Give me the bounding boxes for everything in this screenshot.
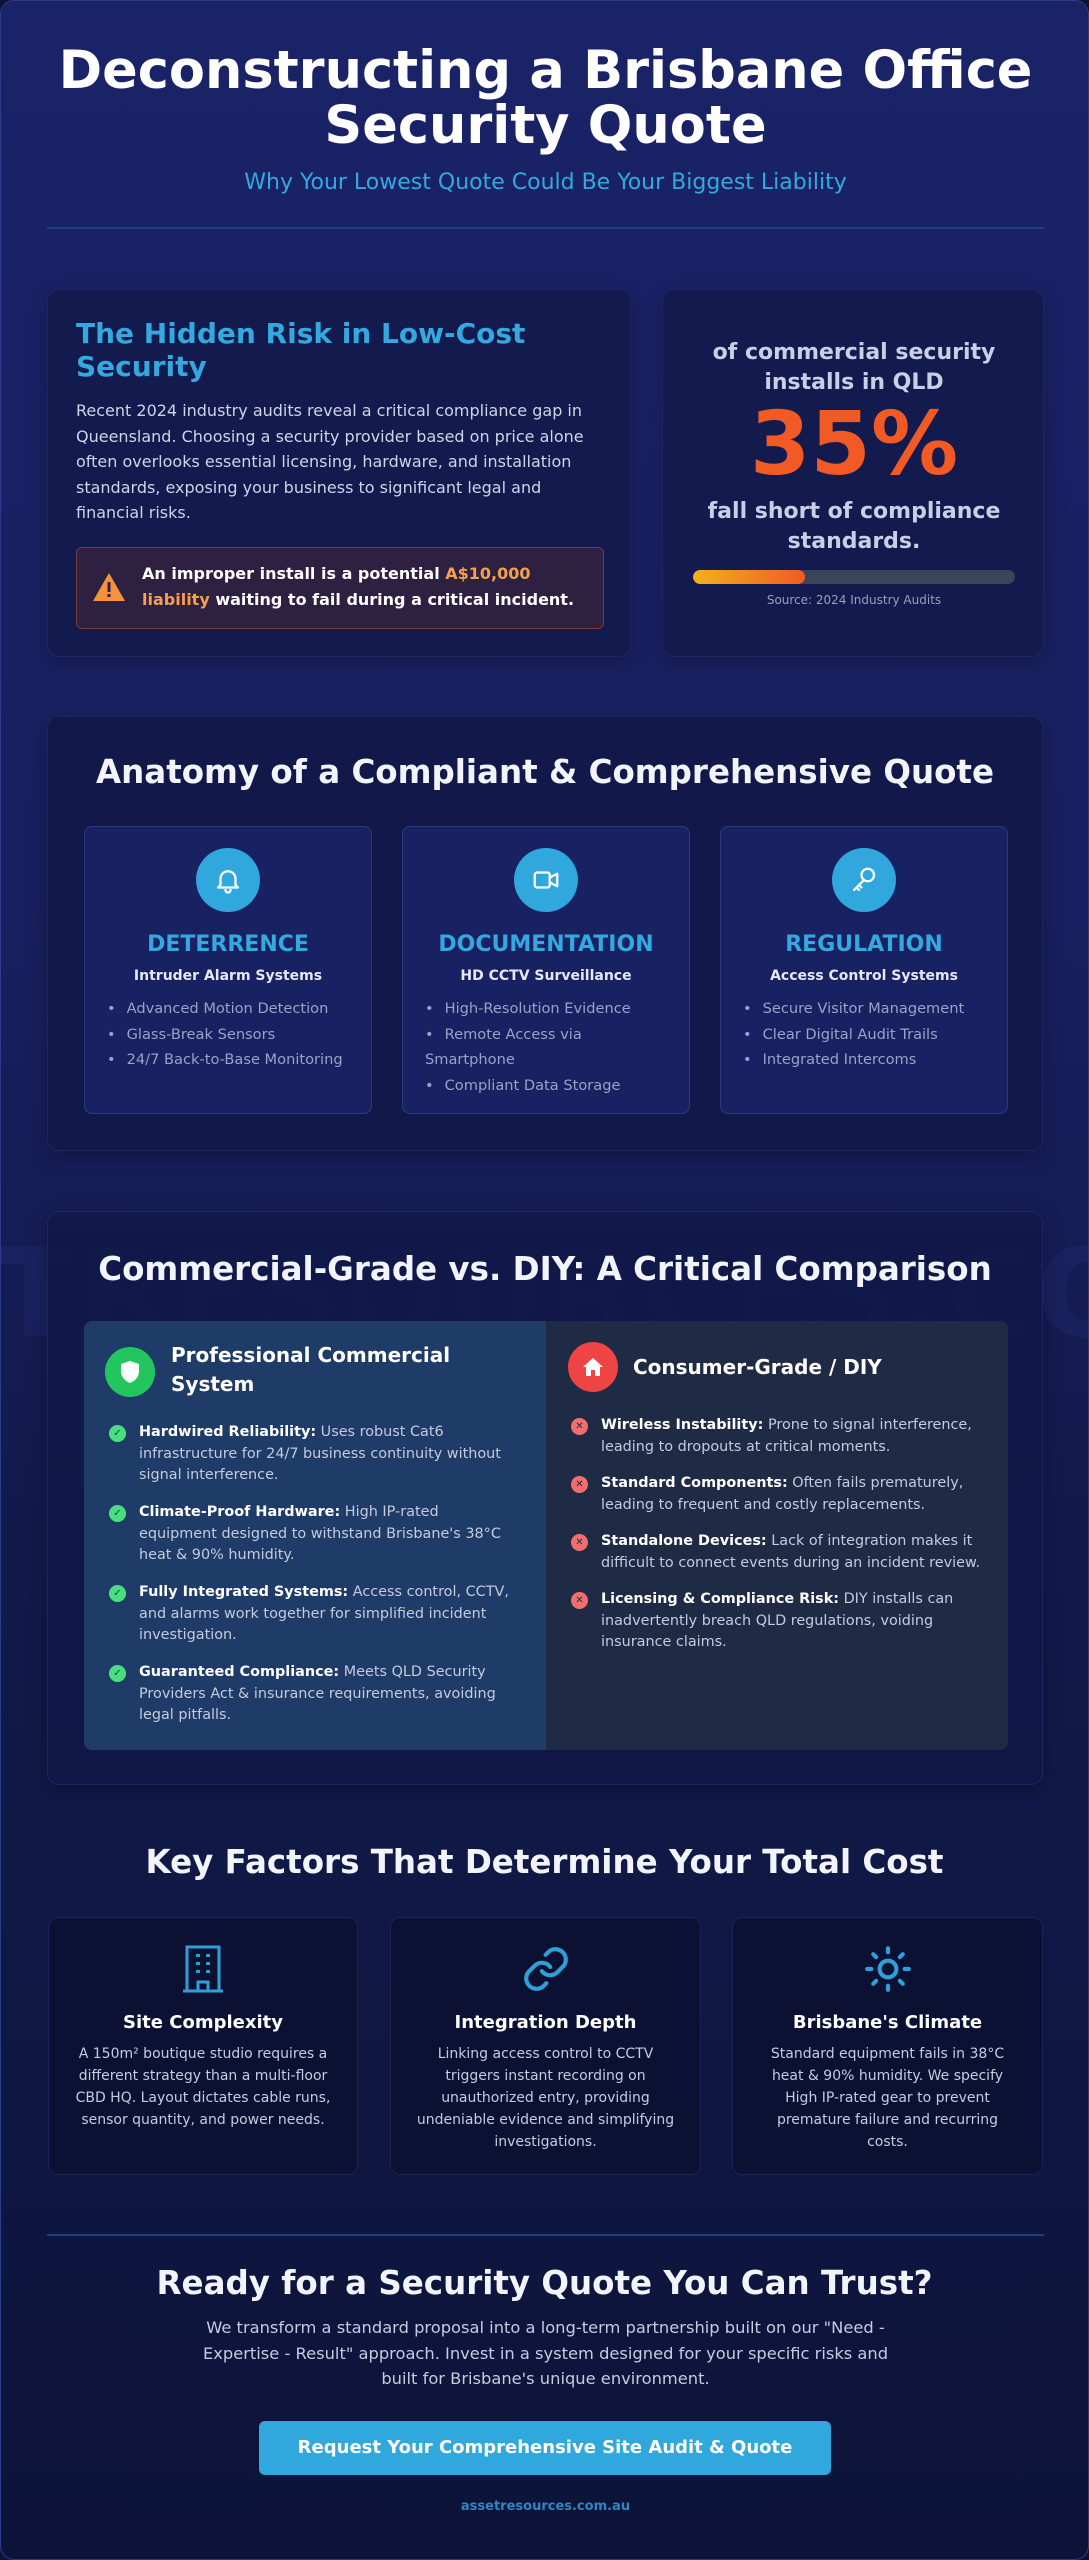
subtitle: Why Your Lowest Quote Could Be Your Biggest Liability (244, 170, 847, 195)
card: regulation: Clear Digital Audit Trails (763, 1026, 938, 1042)
callout: liability warning (76, 547, 604, 629)
card: integration depth: Integration Depth (455, 2012, 636, 2033)
column: professional (84, 1321, 546, 1750)
column: DIY: ✕ (575, 1421, 584, 1432)
items: professional (109, 1424, 509, 1723)
card: documentation: High-Resolution Evidence (445, 1000, 631, 1017)
icon: house (568, 1342, 618, 1392)
footer link: assetresources.com.au (461, 2499, 630, 2514)
heading: professional: Professional Commercial System (171, 1343, 450, 1396)
stat label bottom: fall short of compliance standards. (708, 499, 1000, 554)
card: regulation: REGULATION (785, 932, 943, 957)
column: professional: ✓ (113, 1588, 122, 1599)
items: DIY: Wireless Instability: Prone to signal interference, leading to dropouts at critical moments. (601, 1417, 972, 1455)
card: documentation: DOCUMENTATION (438, 932, 654, 957)
heading: anatomy: Anatomy of a Compliant & Comprehensive Quote (96, 753, 994, 791)
card: documentation: Compliant Data Storage (445, 1076, 620, 1094)
card: regulation (720, 826, 1008, 1114)
panel: anatomy (47, 716, 1043, 1151)
items: professional: Fully Integrated Systems: Access control, CCTV, and alarms work together for simplified incident investigation. (139, 1584, 509, 1643)
heading: hidden risk: The Hidden Risk in Low-Cost Security (76, 317, 525, 383)
card: deterrence: DETERRENCE (147, 932, 309, 957)
text: audit paragraph: Recent 2024 industry audits reveal a critical compliance gap in Queensland. Choosing a security provider based on price alone often overlooks essential licensing, hardware, and installation standards, exposing your business to significant legal and financial risks. (76, 401, 584, 522)
source note: Source: 2024 Industry Audits (767, 593, 941, 607)
heading: key factors: Key Factors That Determine Your Total Cost (146, 1843, 943, 1881)
items: professional: Guaranteed Compliance: Meets QLD Security Providers Act & insurance requirements, avoiding legal pitfalls. (139, 1664, 496, 1723)
card: deterrence: Glass-Break Sensors (127, 1026, 275, 1042)
items: DIY: Standalone Devices: Lack of integration makes it difficult to connect events during an incident review. (601, 1533, 980, 1571)
stat label top: of commercial security installs in QLD (713, 340, 995, 395)
text: CTA paragraph: We transform a standard proposal into a long-term partnership built on our "Need - Expertise - Result" approach. Invest in a system designed for your specific risks and built for Brisbane's unique environment. (203, 2318, 888, 2388)
title (59, 40, 1032, 156)
title: Deconstructing a Brisbane Office (59, 40, 1032, 101)
panel: 35% stat (662, 289, 1044, 657)
heading: CTA: Ready for a Security Quote You Can Trust? (157, 2264, 932, 2302)
card: deterrence: Advanced Motion Detection (127, 1000, 328, 1017)
card: documentation: Remote Access via Smartphone (425, 1026, 582, 1068)
button: CTA (259, 2421, 831, 2475)
panel: hidden risk (47, 289, 631, 657)
icon: building (183, 1946, 223, 1992)
items: professional: Climate-Proof Hardware: High IP-rated equipment designed to withstand Brisbane's 38°C heat & 90% humidity. (139, 1504, 501, 1563)
card: climate (732, 1917, 1043, 2175)
icon: key (832, 848, 896, 912)
card: regulation: Integrated Intercoms (763, 1051, 916, 1068)
column: DIY: ✕ (575, 1537, 584, 1548)
column: DIY (546, 1321, 1008, 1750)
items: DIY (571, 1417, 980, 1650)
stat number: 35% (750, 393, 958, 495)
card: regulation: Secure Visitor Management (763, 1000, 964, 1017)
items: DIY: Standard Components: Often fails prematurely, leading to frequent and costly replacements. (601, 1475, 963, 1513)
icon: link (524, 1947, 568, 1991)
comparison table (84, 1321, 1008, 1750)
column: professional: ✓ (113, 1668, 122, 1679)
card: deterrence: 24/7 Back-to-Base Monitoring (127, 1051, 343, 1068)
card: site complexity: Site Complexity (123, 2012, 283, 2033)
icon: bell (196, 848, 260, 912)
button: CTA: Request Your Comprehensive Site Audit & Quote (298, 2437, 792, 2458)
progress bar (693, 570, 1015, 584)
icon: video camera (514, 848, 578, 912)
column: DIY: ✕ (575, 1595, 584, 1606)
card: integration depth (390, 1917, 701, 2175)
column: DIY: ✕ (575, 1479, 584, 1490)
icon: sun (865, 1946, 911, 1992)
icon: shield (105, 1347, 155, 1397)
card: documentation: HD CCTV Surveillance (460, 968, 632, 984)
card: integration depth: Linking access control to CCTV triggers instant recording on unauthorized entry, providing undeniable evidence and simplifying investigations. (417, 2046, 674, 2150)
column: professional: ✓ (113, 1428, 122, 1439)
heading: comparison: Commercial-Grade vs. DIY: A Critical Comparison (98, 1250, 992, 1288)
card: climate: Brisbane's Climate (793, 2012, 982, 2033)
items: professional: Hardwired Reliability: Uses robust Cat6 infrastructure for 24/7 business continuity without signal interference. (139, 1424, 501, 1483)
card: documentation (402, 826, 690, 1114)
card: deterrence: Intruder Alarm Systems (134, 968, 322, 984)
column: professional: ✓ (113, 1508, 122, 1519)
card: site complexity: A 150m² boutique studio requires a different strategy than a multi-floor CBD HQ. Layout dictates cable runs, sensor quantity, and power needs. (76, 2046, 330, 2128)
card: deterrence (84, 826, 372, 1114)
card: climate: Standard equipment fails in 38°C heat & 90% humidity. We specify High IP-rated gear to prevent premature failure and recurring costs. (771, 2046, 1004, 2150)
title: Security Quote (324, 95, 767, 156)
items: DIY: Licensing & Compliance Risk: DIY installs can inadvertently breach QLD regulations, voiding insurance claims. (601, 1591, 953, 1650)
panel: comparison (47, 1211, 1043, 1785)
icon: warning triangle (93, 573, 125, 601)
card: regulation: Access Control Systems (770, 968, 958, 984)
callout: liability warning: An improper install is a potential A$10,000 liability waiting to fail during a critical incident. (142, 564, 574, 609)
heading: DIY: Consumer-Grade / DIY (633, 1355, 882, 1379)
card: site complexity (48, 1917, 358, 2175)
